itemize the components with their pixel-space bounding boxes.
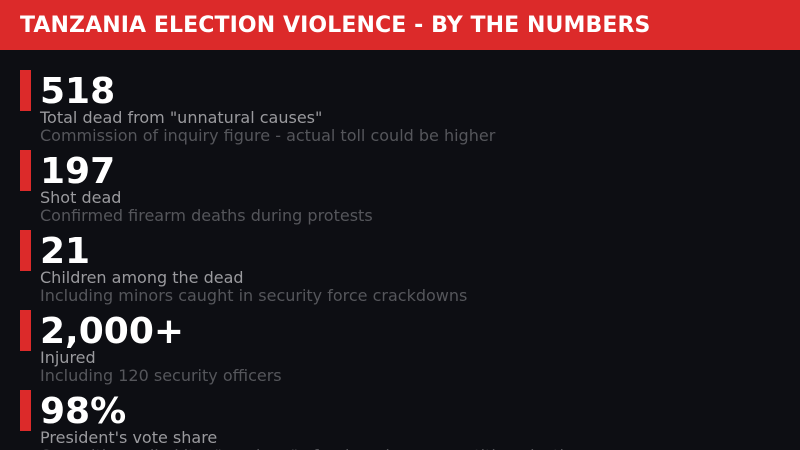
stat: 518 dead: Commission of inquiry figure - actual toll could be higher (40, 126, 495, 145)
stat: 2000+ injured: Including 120 security officers (40, 366, 282, 385)
stat: 98% vote share: President's vote share (40, 428, 217, 447)
stat: 2000+ injured: Injured (40, 348, 96, 367)
stat: 518 dead (20, 70, 496, 145)
title: TANZANIA ELECTION VIOLENCE - BY THE NUMBERS (20, 13, 650, 38)
stat: 518 dead: 518 (40, 71, 115, 112)
stat: 98% vote share: 98% (40, 391, 126, 432)
stat: 518 dead: Total dead from "unnatural causes" (40, 108, 322, 127)
stat: 21 children: Including minors caught in security force crackdowns (40, 286, 467, 305)
stat: 197 shot: Confirmed firearm deaths during protests (40, 206, 373, 225)
stat: 197 shot (20, 150, 373, 225)
stat: 2000+ injured: 2,000+ (40, 311, 184, 352)
stat: 98% vote share (20, 390, 584, 450)
stat: 21 children (20, 230, 467, 305)
stat: 21 children: 21 (40, 231, 90, 272)
stat: 2000+ injured (20, 310, 282, 385)
stat: 21 children: Children among the dead (40, 268, 244, 287)
stat: 197 shot: 197 (40, 151, 115, 192)
header banner (0, 0, 800, 50)
stat: 197 shot: Shot dead (40, 188, 121, 207)
